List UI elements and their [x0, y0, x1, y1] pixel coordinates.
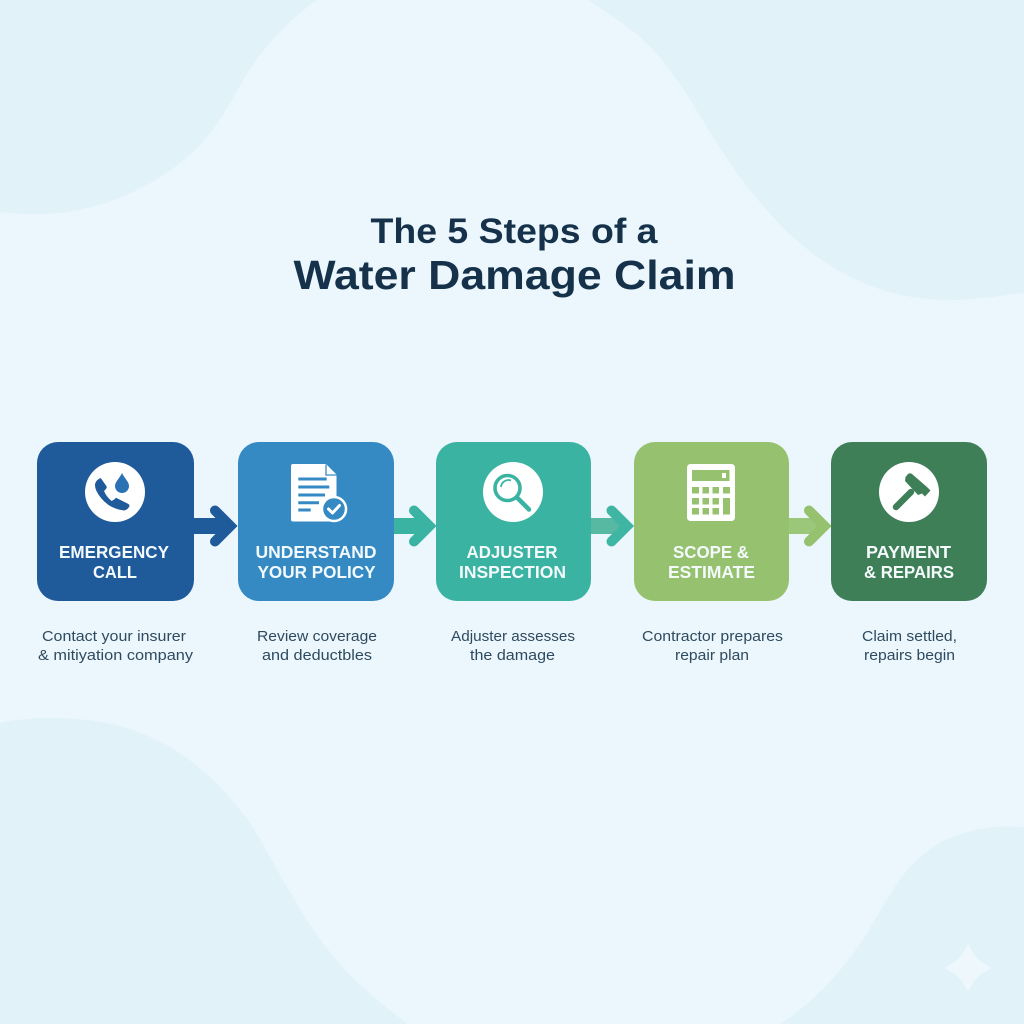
title: The 5 Steps of a	[370, 212, 658, 251]
description: step 1	[38, 628, 194, 664]
description: step 2	[257, 628, 377, 664]
description: step 2: Review coverage	[257, 628, 377, 645]
description: step 4: repair plan	[675, 647, 749, 664]
description: step 1: Contact your insurer	[42, 628, 186, 645]
description: step 1: & mitiyation company	[38, 647, 194, 664]
arrow: step 4 to 5	[787, 510, 824, 542]
background blob: top left	[0, 0, 317, 214]
step 1 card	[37, 442, 194, 601]
step 3: adjuster inspection	[436, 442, 591, 601]
step 3 label: ADJUSTER	[466, 542, 558, 562]
step 3 label: INSPECTION	[459, 562, 566, 582]
step 4 card	[634, 442, 789, 601]
step 5 card	[831, 442, 987, 601]
step 2 label: UNDERSTAND	[256, 542, 376, 562]
step 4 label: SCOPE &	[673, 542, 749, 562]
step 2: understand your policy	[238, 442, 394, 601]
step 5 label	[864, 542, 954, 582]
icon: calculator	[687, 464, 735, 521]
background blob: bottom right	[780, 827, 1024, 1024]
step 5 label: & REPAIRS	[864, 562, 954, 582]
arrow: step 2 to 3	[392, 510, 430, 542]
arrow: step 3 to 4	[589, 510, 627, 542]
step 1 label: CALL	[93, 562, 137, 582]
description: step 4	[642, 628, 783, 664]
background blob: bottom left	[0, 718, 408, 1024]
icon: document with check	[291, 464, 347, 522]
background blob: top right	[588, 0, 1024, 300]
description: step 3: Adjuster assesses	[451, 628, 575, 645]
step 2 label: YOUR POLICY	[258, 562, 376, 582]
description: step 5: Claim settled,	[862, 628, 957, 645]
icon: phone with water drop	[85, 462, 145, 522]
description: step 4: Contractor prepares	[642, 628, 783, 645]
step 2 label	[256, 542, 376, 582]
step 1 label	[59, 542, 169, 582]
step 3 label	[459, 542, 566, 582]
step 4: scope and estimate	[634, 442, 789, 601]
description: step 5: repairs begin	[864, 647, 955, 664]
step 2 card	[238, 442, 394, 601]
step 4 label: ESTIMATE	[668, 562, 755, 582]
step 3 card	[436, 442, 591, 601]
description: step 2: and deductbles	[262, 647, 372, 664]
title: Water Damage Claim	[294, 252, 736, 298]
step 1: emergency call	[37, 442, 194, 601]
step 5: payment and repairs	[831, 442, 987, 601]
step 4 label	[668, 542, 755, 582]
description: step 3	[451, 628, 575, 664]
title	[294, 212, 736, 298]
step 1 label: EMERGENCY	[59, 542, 169, 562]
icon: hammer	[879, 462, 939, 522]
description: step 5	[862, 628, 957, 664]
arrow: step 1 to 2	[192, 510, 230, 542]
step 5 label: PAYMENT	[866, 542, 951, 562]
icon: sparkle	[944, 943, 992, 992]
icon: magnifying glass	[483, 462, 543, 522]
description: step 3: the damage	[470, 647, 555, 664]
